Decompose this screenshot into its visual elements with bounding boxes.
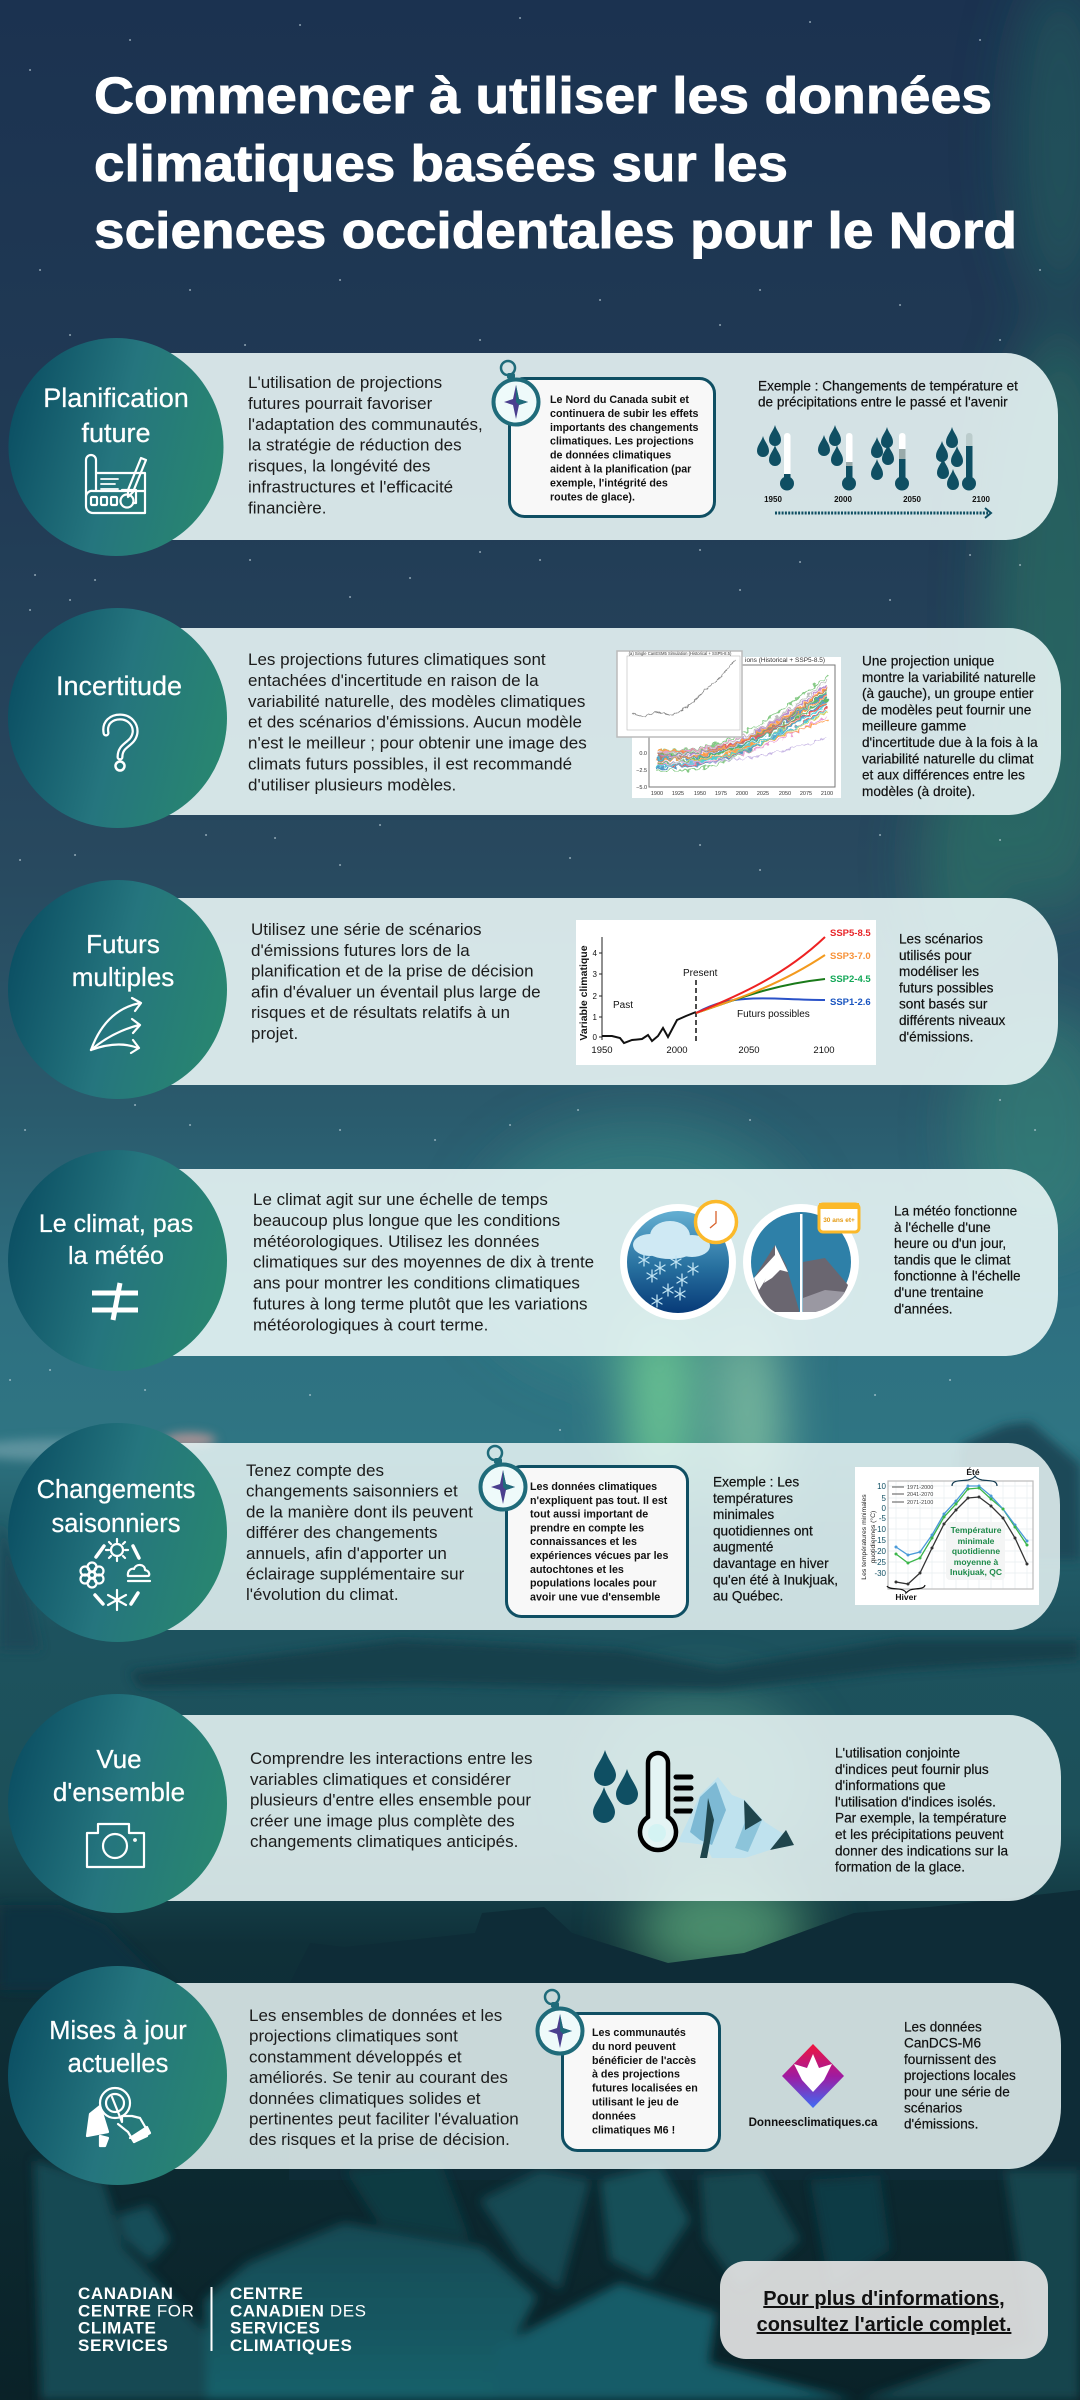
chart: ensemble of model simulations: 0.0 (639, 751, 647, 757)
callout: bénéficier de l'accès (592, 2055, 696, 2067)
logo: Canadian Centre for Climate Services (78, 2284, 367, 2355)
chart: SSP scenarios: 4 (593, 949, 598, 958)
callout: routes de glace). (550, 491, 635, 503)
example caption: de précipitations entre le passé et l'avenir (758, 394, 1008, 410)
heading: saisonniers (52, 1510, 180, 1538)
body text: L'utilisation de projections (248, 373, 442, 392)
chart: thermometers and rain drops 1950 to 2100 (757, 425, 991, 518)
chart: SSP scenarios: 2050 (738, 1045, 760, 1056)
body text: infrastructures et l'efficacité (248, 478, 453, 496)
example text: températures (713, 1491, 793, 1506)
side text: Les données (904, 2020, 982, 2034)
example caption: Exemple : Changements de température et (758, 378, 1018, 394)
title: climatiques basées sur les (94, 135, 788, 192)
chart: SSP scenarios: 2 (593, 992, 598, 1001)
body text: différer des changements (246, 1523, 438, 1542)
chart: SSP scenarios: 0 (593, 1033, 598, 1042)
example text: au Québec. (713, 1589, 783, 1604)
callout: futures localisées en (592, 2083, 698, 2095)
chart: minimum temperature at Inukjuak: -10 (874, 1525, 887, 1534)
side text: de modèles peut fournir une (862, 702, 1031, 717)
example text: Exemple : Les (713, 1474, 799, 1490)
chart: minimum temperature at Inukjuak: 10 (877, 1482, 887, 1491)
chart: minimum temperature at Inukjuak: -30 (874, 1569, 887, 1578)
logo: Donneesclimatiques.ca (749, 2044, 878, 2129)
heading disc (8, 1966, 227, 2185)
body text: changements climatiques anticipés. (250, 1832, 518, 1851)
chart: ensemble of model simulations: 1925 (672, 791, 684, 797)
body text: l'évolution du climat. (246, 1585, 399, 1604)
side text: fournissent des (904, 2052, 996, 2067)
chart: SSP scenarios: Present (683, 968, 718, 979)
callout: importants des changements (550, 422, 699, 434)
icon: question mark (106, 717, 135, 770)
heading: future (81, 418, 151, 448)
chart: SSP scenarios: SSP1-2.6 (830, 997, 871, 1008)
logo: Canadian Centre for Climate Services: CLIMATIQUES (230, 2336, 352, 2355)
call to action button (720, 2261, 1048, 2359)
chart: minimum temperature at Inukjuak: minimale (958, 1536, 995, 1546)
heading: Vue (96, 1744, 142, 1774)
body text: ans pour montrer les conditions climatiques (253, 1274, 580, 1293)
side text: fonctionne à l'échelle (894, 1269, 1021, 1284)
chart: ensemble of model simulations: 1900 (651, 791, 663, 797)
body text: futures pourrait favoriser (248, 394, 433, 413)
body text: changements saisonniers et (246, 1482, 458, 1501)
chart: ensemble of model simulations: 2100 (821, 791, 833, 797)
callout: n'expliquent pas tout. Il est (530, 1495, 668, 1507)
panel background (110, 898, 1058, 1085)
side text: modéliser les (899, 964, 979, 979)
callout: du nord peuvent (592, 2041, 676, 2053)
side text: d'indices peut fournir plus (835, 1762, 989, 1777)
side text: l'utilisation d'indices isolés. (835, 1794, 996, 1809)
icon: hand and megaphone (87, 2088, 150, 2146)
body text: risques, la longévité des (248, 457, 430, 476)
icon: diverging arrows (91, 998, 141, 1053)
chart: minimum temperature at Inukjuak: Les températures minimales (861, 1494, 868, 1580)
callout (494, 361, 714, 516)
side text: d'années. (894, 1301, 953, 1316)
heading disc (8, 880, 227, 1099)
body text: climats futurs possibles, il est recommandé (248, 754, 572, 774)
title: sciences occidentales pour le Nord (94, 202, 1017, 259)
chart: minimum temperature at Inukjuak: Été (966, 1467, 980, 1477)
side text: montre la variabilité naturelle (862, 670, 1036, 685)
side text: (à gauche), un groupe entier (862, 686, 1034, 701)
callout: climatiques M6 ! (592, 2124, 675, 2136)
body text: pertinentes peut faciliter l'évaluation (249, 2110, 519, 2128)
callout: populations locales pour (530, 1578, 656, 1590)
body text: Tenez compte des (246, 1461, 384, 1480)
logo: Donneesclimatiques.ca: Donneesclimatiques.ca (749, 2116, 878, 2129)
chart: SSP scenarios: Futurs possibles (737, 1009, 810, 1020)
chart: ensemble of model simulations: −5.0 (636, 785, 647, 791)
side text: CanDCS-M6 (904, 2036, 981, 2051)
chart: SSP scenarios: SSP3-7.0 (830, 951, 871, 962)
panel background (110, 628, 1061, 815)
body text: afin d'évaluer un éventail plus large de (251, 982, 541, 1001)
icon: not equal (92, 1283, 138, 1320)
side text: d'émissions. (899, 1029, 973, 1044)
chart: ensemble of model simulations: 1950 (694, 791, 706, 797)
chart: SSP scenarios: 3 (593, 970, 598, 979)
body text: la stratégie de réduction des (248, 436, 462, 455)
icon: snow cloud with clock (weather) (620, 1202, 736, 1320)
panel: Changements saisonniers (8, 1423, 1060, 1642)
example text: davantage en hiver (713, 1556, 829, 1571)
callout: tout aussi important de (530, 1509, 648, 1521)
body text: constamment développés et (249, 2047, 462, 2066)
body text: d'utiliser plusieurs modèles. (248, 775, 456, 794)
chart: SSP scenarios: 1 (593, 1013, 598, 1022)
callout: à des projections (592, 2069, 680, 2081)
side text: tandis que le climat (894, 1252, 1011, 1267)
body text: météorologiques à court terme. (253, 1315, 488, 1334)
chart: ensemble of model simulations: ions (Historical + SSP5-8.5) (745, 657, 825, 664)
body text: risques et de résultats relatifs à un (251, 1003, 510, 1022)
callout: aident à la planification (par (550, 464, 691, 476)
body text: entachées d'incertitude en raison de la (248, 671, 539, 690)
panel: Vue d'ensemble (8, 1694, 1061, 1913)
logo: Canadian Centre for Climate Services: SERVICES (230, 2319, 320, 2338)
side text: à l'échelle d'une (894, 1220, 991, 1235)
side text: heure ou d'un jour, (894, 1236, 1006, 1251)
chart: minimum temperature at Inukjuak: -20 (874, 1547, 887, 1556)
chart: minimum temperature at Inukjuak: -25 (874, 1558, 887, 1567)
chart: minimum temperature at Inukjuak: 2041-2070 (907, 1492, 933, 1498)
heading disc (8, 1423, 227, 1642)
icon: season cycle (80, 1539, 150, 1610)
callout: données (592, 2110, 636, 2122)
logo: Canadian Centre for Climate Services: CANADIEN DES (230, 2301, 367, 2320)
chart: SSP scenarios: Past (613, 1000, 633, 1011)
callout: autochtones et les (530, 1564, 624, 1576)
chart: minimum temperature at Inukjuak: quotidiennes (°C) (869, 1511, 877, 1563)
callout: climatiques. Les projections (550, 436, 694, 448)
icon: mountains with calendar (climate): 30 ans et+ (823, 1217, 855, 1224)
panel: Futurs multiples (8, 880, 1058, 1099)
panel background (110, 1443, 1060, 1630)
example text: qu'en été à Inukjuak, (713, 1572, 838, 1587)
side text: d'une trentaine (894, 1285, 984, 1300)
heading: la météo (68, 1242, 164, 1270)
side text: pour une série de (904, 2084, 1010, 2099)
heading disc (8, 1150, 227, 1371)
side text: utilisés pour (899, 948, 972, 963)
inset chart: single simulation: (a) Single CanESM5 Simulation (Historical + SSP5-8.5) (629, 651, 732, 656)
chart: ensemble of model simulations: 1975 (715, 791, 727, 797)
heading disc (8, 338, 224, 556)
chart: minimum temperature at Inukjuak: quotidienne (952, 1546, 1000, 1556)
icon: drops, thermometer and iceberg (593, 1750, 794, 1858)
side text: formation de la glace. (835, 1860, 965, 1875)
callout: de données climatiques (550, 450, 671, 462)
side text: La météo fonctionne (894, 1204, 1017, 1218)
heading: Mises à jour (49, 2017, 187, 2045)
panel background (110, 1983, 1061, 2169)
side text: scénarios (904, 2100, 962, 2116)
body text: annuels, afin d'apporter un (246, 1544, 447, 1563)
callout (538, 1990, 720, 2150)
side text: d'incertitude due à la fois à la (862, 735, 1038, 750)
side text: futurs possibles (899, 980, 994, 995)
logo: Canadian Centre for Climate Services: CANADIAN (78, 2284, 173, 2303)
chart: ensemble of model simulations (617, 651, 841, 798)
body text: financière. (248, 498, 326, 517)
panel background (110, 353, 1058, 540)
side text: d'informations que (835, 1778, 946, 1793)
chart: thermometers and rain drops 1950 to 2100: 1950 (764, 495, 782, 504)
chart: ensemble of model simulations: 2075 (800, 791, 812, 797)
body text: l'adaptation des communautés, (248, 415, 483, 434)
logo: Canadian Centre for Climate Services: CENTRE (230, 2284, 304, 2303)
body text: Les ensembles de données et les (249, 2006, 502, 2025)
chart: ensemble of model simulations: 2025 (757, 791, 769, 797)
chart: SSP scenarios: Variable climatique (578, 945, 590, 1041)
body text: d'émissions futures lors de la (251, 941, 470, 960)
callout: Les communautés (592, 2027, 686, 2039)
callout: Le Nord du Canada subit et (550, 394, 689, 406)
icon: camera (87, 1824, 144, 1867)
body text: Les projections futures climatiques sont (248, 650, 546, 669)
panel background (110, 1169, 1058, 1356)
callout: prendre en compte les (530, 1522, 644, 1534)
chart: SSP scenarios: 2000 (666, 1045, 688, 1056)
callout: utilisant le jeu de (592, 2096, 679, 2108)
chart: SSP scenarios: SSP5-8.5 (830, 928, 871, 939)
heading: multiples (72, 962, 174, 992)
chart: SSP scenarios (576, 920, 876, 1065)
chart: thermometers and rain drops 1950 to 2100: 2100 (972, 495, 990, 504)
panel: Le climat, pas la météo (8, 1150, 1058, 1371)
heading: Le climat, pas (39, 1210, 193, 1238)
heading: Incertitude (56, 671, 182, 701)
side text: Par exemple, la température (835, 1811, 1007, 1826)
chart: SSP scenarios: 1950 (591, 1045, 613, 1056)
body text: créer une image plus complète des (250, 1811, 515, 1830)
body text: climatiques sur des moyennes de dix à trente (253, 1253, 594, 1272)
call to action button: Pour plus d'informations, (763, 2288, 1005, 2310)
icon: plan document and pencil (86, 455, 146, 513)
panel: Mises à jour actuelles (8, 1966, 1061, 2185)
side text: et les précipitations peuvent (835, 1827, 1004, 1842)
chart: ensemble of model simulations: 2000 (736, 791, 748, 797)
body text: météorologiques. Utilisez les données (253, 1232, 539, 1251)
body text: planification et de la prise de décision (251, 962, 534, 981)
body text: variables climatiques et considérer (250, 1770, 511, 1789)
body text: Utilisez une série de scénarios (251, 920, 482, 939)
body text: plusieurs d'entre elles ensemble pour (250, 1791, 531, 1810)
side text: Une projection unique (862, 654, 994, 668)
body text: et des scénarios d'émissions. Aucun modèle (248, 713, 582, 732)
logo: Canadian Centre for Climate Services: CENTRE FOR (78, 2301, 195, 2320)
title: Commencer à utiliser les données (94, 67, 992, 124)
heading disc (8, 608, 227, 828)
heading: d'ensemble (53, 1777, 185, 1807)
callout: avoir une vue d'ensemble (530, 1591, 660, 1603)
panel background (110, 1715, 1061, 1901)
chart: minimum temperature at Inukjuak: 0 (882, 1504, 887, 1513)
heading: Futurs (86, 929, 160, 959)
logo: Canadian Centre for Climate Services: CLIMATE (78, 2319, 156, 2338)
chart: minimum temperature at Inukjuak: 2071-2100 (907, 1500, 933, 1506)
callout (480, 1446, 688, 1616)
body text: projections climatiques sont (249, 2027, 458, 2046)
heading: Planification (43, 383, 189, 413)
body text: de la manière dont ils peuvent (246, 1502, 473, 1521)
chart: minimum temperature at Inukjuak: -15 (874, 1536, 887, 1545)
inset chart: single simulation (617, 651, 742, 737)
callout: continuera de subir les effets (550, 408, 699, 420)
example text: minimales (713, 1507, 774, 1522)
chart: minimum temperature at Inukjuak: Température (951, 1525, 1002, 1535)
callout: exemple, l'intégrité des (550, 477, 668, 489)
call to action button: consultez l'article complet. (757, 2314, 1011, 2336)
chart: thermometers and rain drops 1950 to 2100: 2050 (903, 495, 921, 504)
chart: SSP scenarios: SSP2-4.5 (830, 974, 871, 985)
example text: quotidiennes ont (713, 1523, 813, 1538)
chart: SSP scenarios: 2100 (813, 1045, 835, 1056)
side text: et aux différences entre les (862, 768, 1025, 783)
side text: d'émissions. (904, 2117, 978, 2132)
body text: éclairage supplémentaire sur (246, 1564, 465, 1584)
chart: ensemble of model simulations: 2050 (779, 791, 791, 797)
body text: n'est le meilleur ; pour obtenir une image des (248, 734, 587, 753)
chart: minimum temperature at Inukjuak: moyenne à (954, 1557, 998, 1567)
side text: L'utilisation conjointe (835, 1746, 960, 1760)
chart: minimum temperature at Inukjuak: -5 (879, 1514, 887, 1523)
chart: minimum temperature at Inukjuak: Inukjuak, QC (950, 1567, 1002, 1577)
chart: thermometers and rain drops 1950 to 2100: 2000 (834, 495, 852, 504)
side text: variabilité naturelle du climat (862, 751, 1034, 766)
callout: Les données climatiques (530, 1481, 657, 1493)
side text: modèles (à droite). (862, 784, 975, 799)
side text: meilleure gamme (862, 719, 966, 734)
heading: Changements (37, 1476, 195, 1504)
body text: variabilité naturelle, des modèles climatiques (248, 692, 585, 711)
chart: minimum temperature at Inukjuak: 5 (882, 1494, 887, 1503)
side text: Les scénarios (899, 932, 983, 946)
logo: Canadian Centre for Climate Services: SERVICES (78, 2336, 168, 2355)
side text: différents niveaux (899, 1013, 1006, 1028)
heading: actuelles (68, 2050, 168, 2078)
side text: projections locales (904, 2068, 1016, 2083)
body text: des risques et la prise de décision. (249, 2130, 510, 2149)
body text: Le climat agit sur une échelle de temps (253, 1190, 548, 1209)
chart: minimum temperature at Inukjuak: Hiver (895, 1592, 917, 1602)
body text: Comprendre les interactions entre les (250, 1749, 533, 1768)
body text: beaucoup plus longue que les conditions (253, 1211, 560, 1230)
icon: mountains with calendar (climate) (743, 1203, 859, 1320)
body text: futures à long terme plutôt que les variations (253, 1294, 588, 1314)
side text: sont basés sur (899, 997, 988, 1012)
chart: minimum temperature at Inukjuak: 1971-2000 (907, 1485, 933, 1491)
example text: augmenté (713, 1540, 773, 1555)
body text: projet. (251, 1024, 298, 1043)
heading disc (8, 1694, 227, 1913)
panel: Incertitude (8, 608, 1061, 828)
side text: donner des indications sur la (835, 1843, 1008, 1858)
body text: données climatiques solides et (249, 2089, 481, 2108)
chart: minimum temperature at Inukjuak (855, 1467, 1039, 1605)
body text: améliorés. Se tenir au courant des (249, 2068, 508, 2087)
callout: connaissances et les (530, 1536, 637, 1548)
panel: Planification future (8, 338, 1058, 556)
chart: ensemble of model simulations: −2.5 (636, 768, 647, 774)
callout: expériences vécues par les (530, 1550, 668, 1562)
